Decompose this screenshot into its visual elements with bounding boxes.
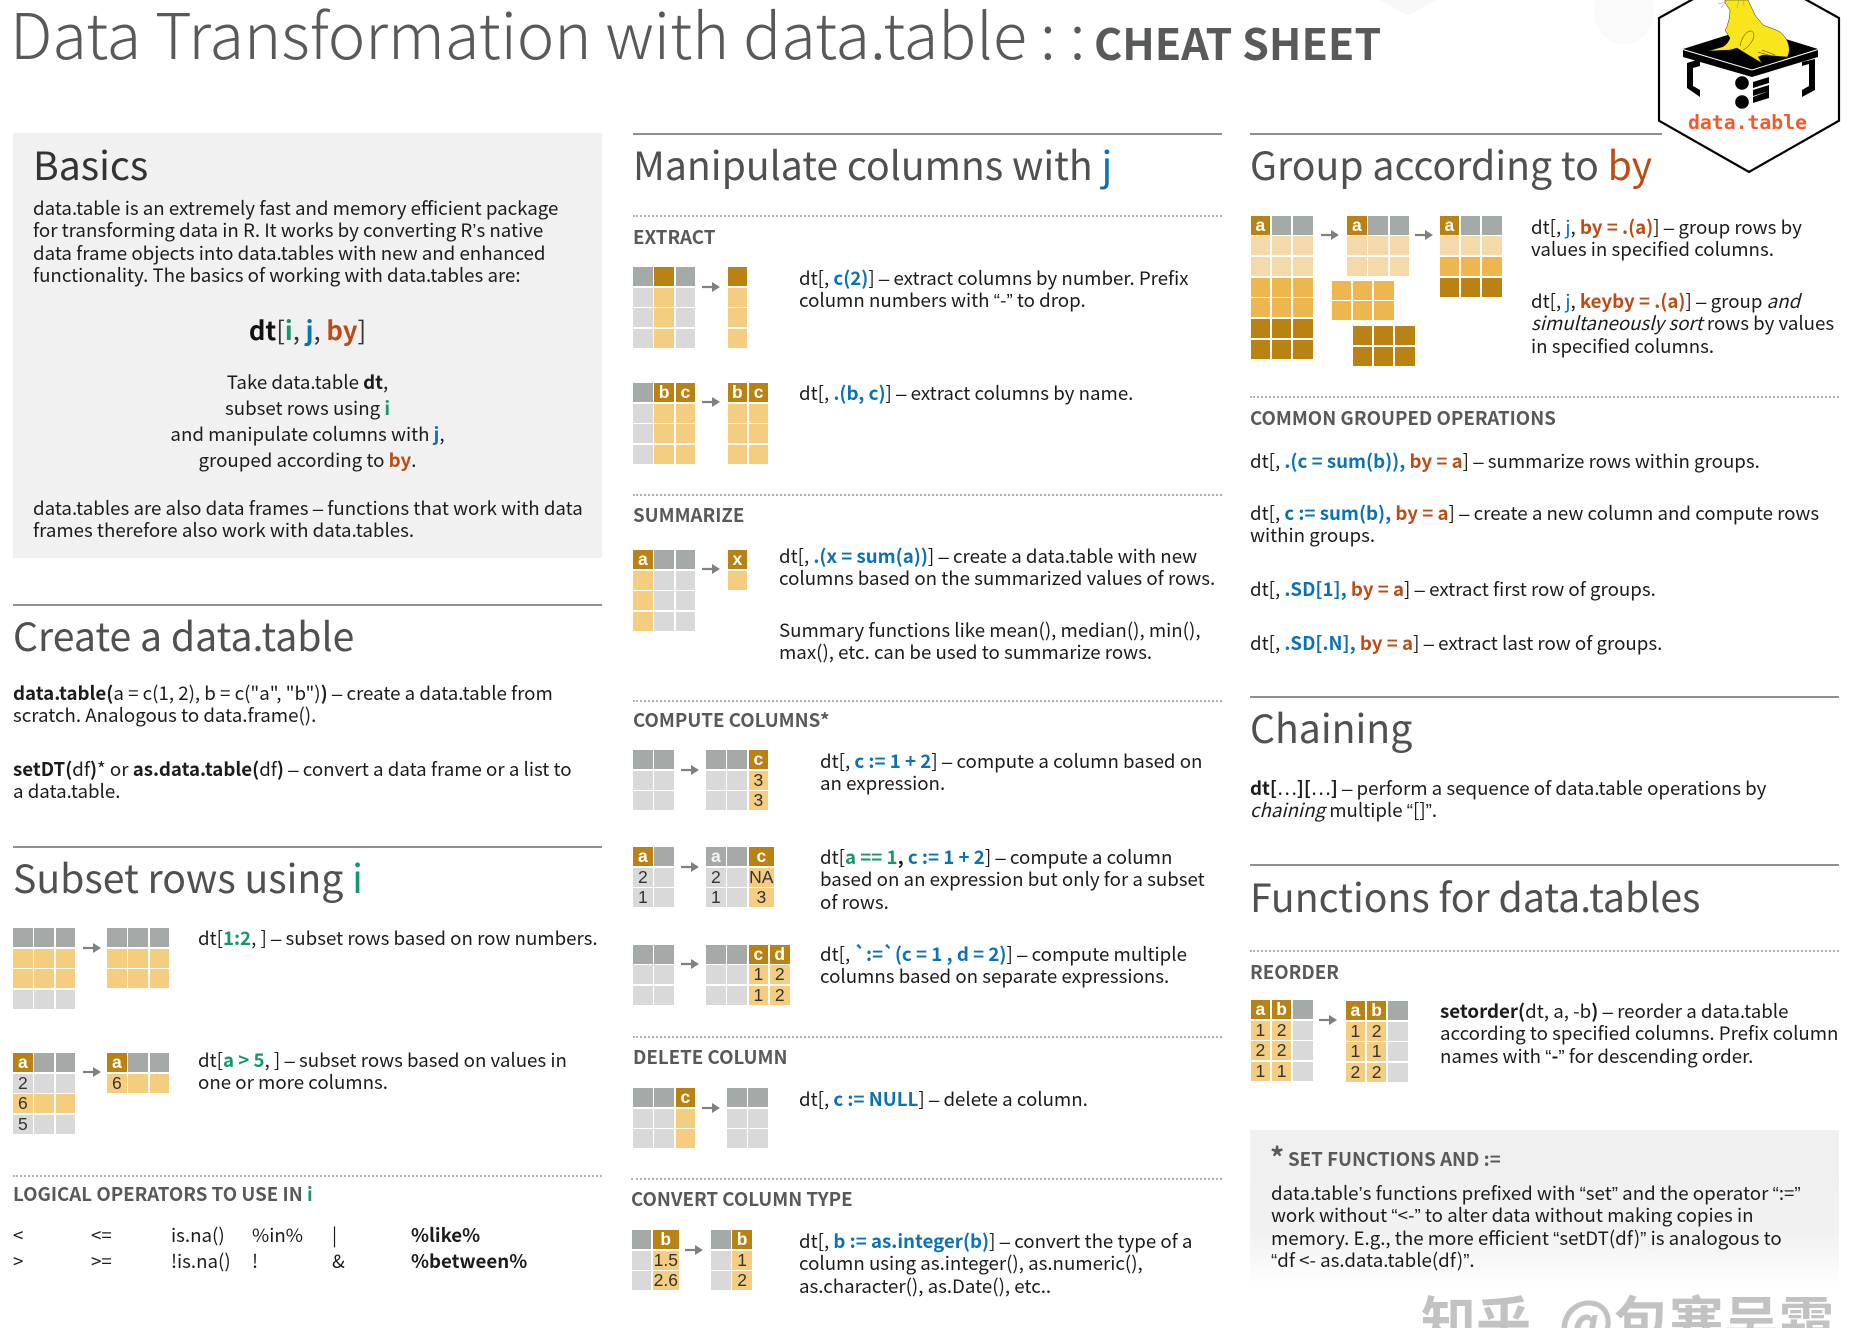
table: compute multiple output: c xyxy=(754,944,763,964)
text: operators col 4: ! xyxy=(252,1246,258,1274)
text: set functions: data.table’s functions prefixed with “set” and the operator “:=” xyxy=(1271,1178,1801,1206)
text: compute: an expression. xyxy=(820,769,945,796)
table: reorder output: 1 xyxy=(1350,1021,1360,1041)
heading: compute columns: COMPUTE COLUMNS* xyxy=(633,706,829,733)
text: introduction: data.table is an extremely fast and memory efficient package xyxy=(33,194,558,220)
heading: functions for data.tables: Functions for data.tables xyxy=(1250,868,1700,924)
table: input values: 2 xyxy=(18,1073,28,1093)
text: by: dt[, j, by = .(a)] – group rows by xyxy=(1531,212,1802,240)
text: new column by group: dt[, c := sum(b), by = a] – create a new column and compute rows xyxy=(1250,498,1819,526)
text: summary functions: max(), etc. can be used to summarize rows. xyxy=(779,638,1152,665)
table: input values: a xyxy=(18,1052,28,1072)
text: formula explained: grouped according to by. xyxy=(198,446,416,472)
text: last row: dt[, .SD[.N], by = a] – extract last row of groups. xyxy=(1250,628,1662,656)
text: operators col 3 xyxy=(171,1220,231,1274)
table: group split 3 xyxy=(1352,326,1415,366)
text: operators col 4 xyxy=(252,1220,303,1274)
text: convert xyxy=(799,1230,1192,1297)
table: convert output: 1 xyxy=(737,1250,747,1270)
table: output rows xyxy=(107,928,169,988)
table: compute multiple output: 2 xyxy=(775,985,785,1005)
heading: chaining: Chaining xyxy=(1250,699,1412,755)
heading: basics: Basics xyxy=(33,136,148,192)
text: operators col 4: %in% xyxy=(252,1220,303,1248)
arrow xyxy=(685,1244,703,1256)
text: data.table() xyxy=(13,678,553,728)
title: cheat sheet: CHEAT SHEET xyxy=(1094,10,1381,72)
text: subset by row numbers: dt[1:2, ] – subset rows based on row numbers. xyxy=(198,924,598,950)
table: output values: 6 xyxy=(112,1073,122,1093)
table: reorder output: a xyxy=(1350,1000,1360,1020)
table: extract by name input xyxy=(633,382,695,464)
table: compute subset input: 2 xyxy=(638,867,648,887)
text: setDT(): setDT(df)* or as.data.table(df) – convert a data frame or a list to xyxy=(13,754,572,782)
table: reorder input: 2 xyxy=(1277,1040,1286,1060)
panel: manipulate columns with j xyxy=(631,133,1222,1298)
heading: delete column: DELETE COLUMN xyxy=(633,1043,787,1070)
text: operators col 2: <= xyxy=(91,1220,112,1248)
text: extract by number: column numbers with “-” to drop. xyxy=(799,286,1086,313)
text: keyby: simultaneously sort rows by values xyxy=(1531,309,1834,336)
panel: group according to by xyxy=(1250,133,1839,693)
text: keyby xyxy=(1531,290,1834,357)
table: reorder input: 1 xyxy=(1277,1061,1286,1081)
text: chaining xyxy=(1250,776,1766,822)
arrow xyxy=(702,282,720,292)
text: data frames note: data.tables are also data frames – functions that work with data xyxy=(33,494,583,520)
text: set functions: memory. E.g., the more efficient “setDT(df)” is analogous to xyxy=(1271,1224,1782,1250)
table: reorder output: 2 xyxy=(1372,1062,1381,1082)
panel: create a data.table xyxy=(13,604,602,804)
text: new column by group: within groups. xyxy=(1250,521,1375,548)
text: setorder: names with “-” for descending order. xyxy=(1440,1042,1753,1068)
heading: reorder: REORDER xyxy=(1250,958,1339,985)
arrow xyxy=(681,764,699,776)
text: subset by values: one or more columns. xyxy=(198,1068,388,1095)
text: compute subset xyxy=(820,846,1205,913)
text: delete: dt[, c := NULL] – delete a column. xyxy=(799,1084,1088,1112)
table: compute subset input: 1 xyxy=(638,887,648,907)
text: operators col 3: is.na() xyxy=(171,1220,225,1248)
text: new column by group xyxy=(1250,502,1819,546)
table: reorder input: a xyxy=(1255,999,1265,1019)
table: input values xyxy=(13,1052,75,1134)
table: group input: a xyxy=(1255,214,1265,234)
table: reorder output: b xyxy=(1371,1000,1382,1020)
table: reorder output: 1 xyxy=(1350,1041,1360,1061)
table: extract by number output xyxy=(728,267,747,348)
text: summary functions xyxy=(779,618,1201,664)
icon: asterisk: * xyxy=(1270,1136,1284,1176)
text: data frames note: frames therefore also work with data.tables. xyxy=(33,516,414,543)
text: setorder xyxy=(1440,1000,1838,1067)
text: extract by number: dt[, c(2)] – extract columns by number. Prefix xyxy=(799,264,1189,290)
text: extract by number xyxy=(799,264,1189,313)
heading: summarize: SUMMARIZE xyxy=(633,501,744,528)
table: input rows xyxy=(13,928,75,1009)
table: convert input: 2.6 xyxy=(654,1270,678,1290)
table: compute output xyxy=(706,750,768,810)
text: summarize within groups: dt[, .(c = sum(b)), by = a] – summarize rows within groups. xyxy=(1250,446,1760,474)
table: reorder input: 1 xyxy=(1255,1061,1265,1081)
arrow xyxy=(702,1102,720,1114)
text: formula explained: subset rows using i xyxy=(225,394,390,420)
table: compute multiple output: 1 xyxy=(754,964,763,984)
table: group split 2 xyxy=(1332,280,1394,320)
text: operators col 3: !is.na() xyxy=(171,1246,231,1274)
text: operators col 1: > xyxy=(13,1246,23,1274)
text: introduction: functionality. The basics of working with data.tables are: xyxy=(33,261,521,288)
table: compute multiple output: d xyxy=(774,944,785,964)
table: convert input xyxy=(632,1230,679,1290)
text: operators col 1: < xyxy=(13,1220,23,1248)
table: group input xyxy=(1250,216,1313,359)
text: operators col 2 xyxy=(91,1220,112,1274)
text: operators col 2: >= xyxy=(91,1246,112,1274)
text: data.table(): scratch. Analogous to data.frame(). xyxy=(13,701,316,728)
text: by: values in specified columns. xyxy=(1531,235,1774,262)
text: data frames note xyxy=(33,494,583,543)
table: compute subset output: c xyxy=(756,846,766,866)
table: compute subset output: 3 xyxy=(756,887,766,907)
table: summarize input: a xyxy=(638,549,648,569)
text: formula explained: Take data.table dt, xyxy=(227,368,388,394)
table: reorder input: 1 xyxy=(1255,1020,1265,1040)
panel: subset rows using i xyxy=(13,846,602,1274)
table: compute subset output: NA xyxy=(749,867,773,887)
text: subset by values: dt[a > 5, ] – subset rows based on values in xyxy=(198,1046,567,1072)
table: compute multiple output: 1 xyxy=(754,985,763,1005)
table: group output: a xyxy=(1444,214,1454,234)
text: compute subset: of rows. xyxy=(820,888,889,914)
text: introduction: for transforming data in R. It works by converting R’s native xyxy=(33,216,543,243)
arrow xyxy=(1319,1014,1337,1026)
text: compute subset: based on an expression but only for a subset xyxy=(820,865,1205,892)
faint background shapes xyxy=(1370,0,1670,60)
arrow xyxy=(681,958,699,970)
table: convert output xyxy=(711,1230,752,1290)
arrow xyxy=(83,943,101,953)
table: compute multiple output xyxy=(706,944,790,1005)
text: operators col 5 xyxy=(332,1220,345,1274)
panel: set functions and := xyxy=(1250,1130,1839,1288)
heading: common grouped operations: COMMON GROUPED OPERATIONS xyxy=(1250,404,1556,431)
text: keyby: dt[, j, keyby = .(a)] – group and xyxy=(1531,286,1800,314)
text: set functions: work without “<-” to alter data without making copies in xyxy=(1271,1201,1753,1228)
text: setDT() xyxy=(13,754,572,804)
table: reorder input: 2 xyxy=(1255,1040,1265,1060)
table: compute subset output xyxy=(706,847,774,907)
table: compute output: 3 xyxy=(754,770,763,790)
table: input values: 5 xyxy=(18,1114,28,1134)
heading: subset rows using i: Subset rows using i xyxy=(13,849,363,905)
table: convert input: 1.5 xyxy=(654,1250,678,1270)
table: delete input: c xyxy=(681,1087,690,1107)
arrow xyxy=(702,564,720,574)
table: reorder input: 2 xyxy=(1277,1020,1286,1040)
text: compute multiple xyxy=(820,942,1187,988)
table: extract by number input xyxy=(633,267,695,348)
heading: group according to by: Group according to by xyxy=(1250,136,1652,192)
table: group output xyxy=(1440,216,1502,297)
table: compute input xyxy=(633,750,674,810)
text: compute multiple: columns based on separate expressions. xyxy=(820,962,1169,989)
table: input values: 6 xyxy=(18,1093,28,1113)
table: compute output: 3 xyxy=(754,790,763,810)
panel: functions for data.tables xyxy=(1250,864,1839,1089)
text: keyby: in specified columns. xyxy=(1531,332,1714,358)
text: formula explained: and manipulate columns with j, xyxy=(170,420,445,446)
table: summarize input xyxy=(633,549,695,631)
arrow xyxy=(83,1067,101,1077)
table: compute output: c xyxy=(754,749,763,769)
text: operators col 1 xyxy=(13,1220,23,1274)
text: compute subset: dt[a == 1, c := 1 + 2] – compute a column xyxy=(820,842,1172,870)
text: summarize xyxy=(779,544,1215,590)
table: output values xyxy=(107,1052,169,1093)
text: summarize: columns based on the summarized values of rows. xyxy=(779,564,1215,591)
table: compute subset output: 2 xyxy=(711,867,721,887)
text: operators col 6: %like% xyxy=(411,1220,480,1248)
arrow xyxy=(681,861,699,873)
text: formula explained xyxy=(170,368,445,472)
formula: dt[i, j, by]: dt[i, j, by] xyxy=(249,310,366,348)
table: extract by name output xyxy=(728,382,768,464)
arrow xyxy=(1414,229,1432,241)
table: compute subset input xyxy=(633,847,674,907)
panel: basics xyxy=(13,133,602,558)
text: compute: dt[, c := 1 + 2] – compute a column based on xyxy=(820,746,1202,774)
table: group split 1 xyxy=(1347,216,1409,276)
text: data.table(): data.table(a = c(1, 2), b = c("a", "b")) – create a data.table from xyxy=(13,678,553,706)
text: first row: dt[, .SD[1], by = a] – extract first row of groups. xyxy=(1250,574,1656,602)
table: convert input: b xyxy=(660,1229,671,1249)
table: compute subset output: 1 xyxy=(711,887,721,907)
table: reorder input xyxy=(1250,1000,1313,1081)
text: convert: dt[, b := as.integer(b)] – convert the type of a xyxy=(799,1226,1192,1254)
table: extract by name input: c xyxy=(681,382,690,402)
text: operators col 6 xyxy=(411,1220,527,1274)
icon: data.table hex logo: data.table xyxy=(1688,111,1807,134)
table: summarize output: x xyxy=(732,549,742,569)
text: introduction: data frame objects into data.tables with new and enhanced xyxy=(33,238,545,266)
table: extract by name output: c xyxy=(754,382,763,402)
table: compute subset output: a xyxy=(711,846,721,866)
text: chaining: chaining multiple “[]”. xyxy=(1250,796,1437,823)
arrow xyxy=(1321,229,1339,241)
heading: convert column type: CONVERT COLUMN TYPE xyxy=(631,1185,853,1212)
table: output values: a xyxy=(112,1052,122,1072)
text: set functions: “df <- as.data.table(df)”. xyxy=(1271,1246,1475,1273)
text: extract by name: dt[, .(b, c)] – extract columns by name. xyxy=(799,378,1133,406)
icon: data.table hex logo xyxy=(1658,0,1840,174)
panel: chaining xyxy=(1250,696,1839,836)
text: set functions xyxy=(1271,1182,1801,1272)
table: delete output xyxy=(727,1088,768,1148)
text: chaining: dt[…][…] – perform a sequence of data.table operations by xyxy=(1250,774,1766,800)
table: delete input xyxy=(633,1088,695,1148)
text: compute multiple: dt[, `:=`(c = 1 , d = 2)] – compute multiple xyxy=(820,940,1187,966)
text: introduction xyxy=(33,194,558,288)
heading: set functions: SET FUNCTIONS AND := xyxy=(1288,1145,1501,1172)
table: extract by name output: b xyxy=(732,382,743,402)
table: reorder output xyxy=(1346,1001,1408,1082)
text: convert: as.character(), as.Date(), etc.. xyxy=(799,1272,1051,1298)
table: compute subset input: a xyxy=(638,846,648,866)
text: summarize: dt[, .(x = sum(a))] – create a data.table with new xyxy=(779,542,1197,568)
table: reorder output: 2 xyxy=(1350,1062,1360,1082)
table: summarize output xyxy=(728,549,747,590)
text: setorder: according to specified columns. Prefix column xyxy=(1440,1019,1838,1046)
text: summary functions: Summary functions like mean(), median(), min(), xyxy=(779,616,1201,642)
table: convert output: b xyxy=(737,1229,747,1249)
text: convert: column using as.integer(), as.numeric(), xyxy=(799,1249,1143,1276)
text: operators col 5: & xyxy=(332,1246,345,1274)
table: reorder output: 1 xyxy=(1372,1041,1381,1061)
table: reorder output: 2 xyxy=(1372,1021,1381,1041)
text: operators col 5: | xyxy=(332,1220,337,1248)
heading: logical operators: LOGICAL OPERATORS TO USE IN i xyxy=(13,1180,313,1207)
table: compute multiple input xyxy=(633,944,674,1005)
heading: extract: EXTRACT xyxy=(633,223,715,250)
heading: create a data.table: Create a data.table xyxy=(13,607,354,663)
text: by xyxy=(1531,216,1802,260)
text: compute xyxy=(820,750,1202,794)
table: reorder input: b xyxy=(1276,999,1287,1019)
text: subset by values xyxy=(198,1046,567,1095)
heading: manipulate columns with j: Manipulate columns with j xyxy=(633,136,1112,192)
table: group split 1: a xyxy=(1352,214,1362,234)
text: operators col 6: %between% xyxy=(411,1246,527,1274)
table: compute multiple output: 2 xyxy=(775,964,785,984)
table: extract by name input: b xyxy=(659,382,669,402)
text: setDT(): a data.table. xyxy=(13,777,120,804)
arrow xyxy=(702,397,720,407)
title xyxy=(10,0,1381,78)
text: setorder: setorder(dt, a, -b) – reorder a data.table xyxy=(1440,996,1788,1024)
table: convert output: 2 xyxy=(737,1270,747,1290)
